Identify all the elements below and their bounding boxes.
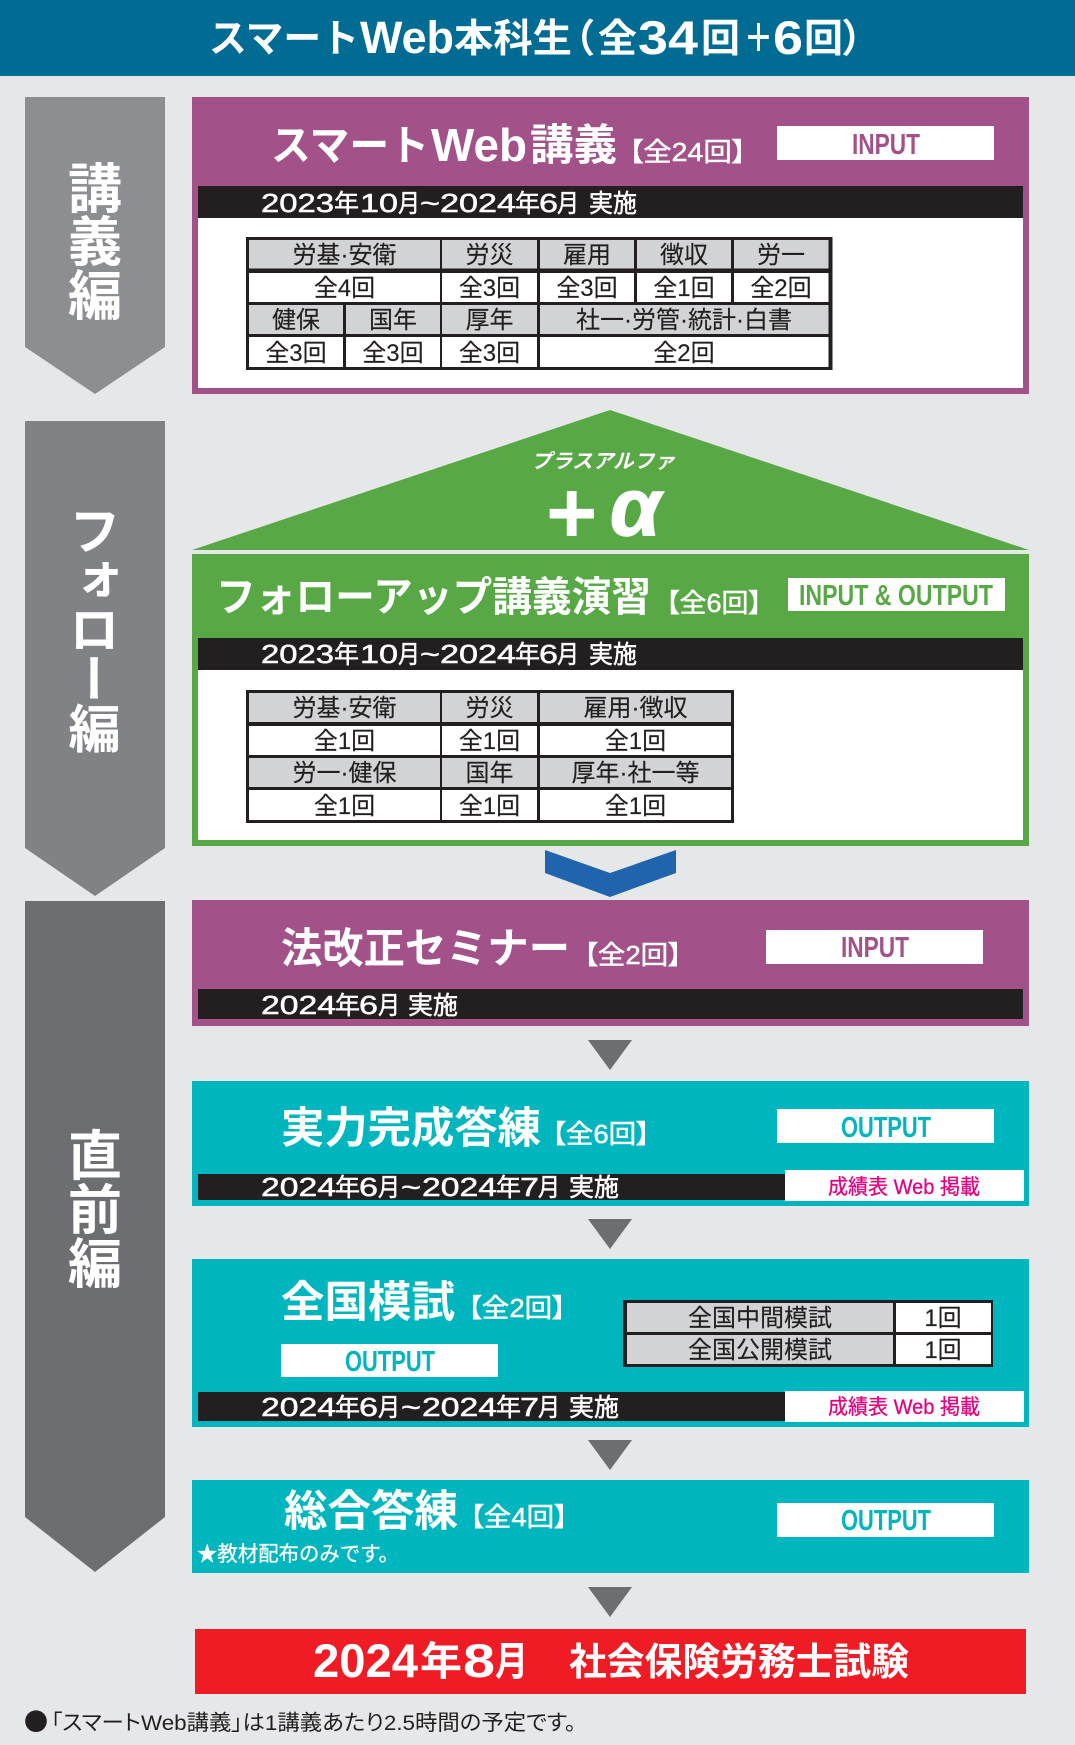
roof: プラスアルファ +α: プラスアルファ bbox=[531, 450, 676, 473]
side arrow: 講義編: 義 bbox=[68, 213, 122, 273]
footnote: ● bbox=[24, 1702, 48, 1737]
panel: 全国模試: ~ bbox=[401, 1392, 421, 1422]
panel: 全国模試: 成績表 Web 掲載 bbox=[828, 1396, 980, 1419]
panel: 実力完成答練: ~ bbox=[401, 1172, 421, 1202]
panel: 総合答練: 総合答練 bbox=[284, 1488, 458, 1536]
table: 講義 schedule: 全4回 bbox=[314, 275, 375, 302]
table: 講義 schedule: 全3回 bbox=[265, 340, 327, 367]
panel: フォローアップ講義演習: 2023 bbox=[261, 639, 334, 669]
table: 講義 schedule bbox=[246, 237, 832, 370]
roof: プラスアルファ +α: + bbox=[546, 463, 597, 562]
table: 講義 schedule: 全3回 bbox=[556, 275, 618, 302]
side arrow: 講義編: 編 bbox=[68, 267, 122, 327]
panel: 総合答練: 【全4回】 bbox=[470, 1502, 568, 1532]
table: フォローアップ schedule: 労災 bbox=[466, 695, 514, 722]
side arrow: 直前編: 編 bbox=[68, 1235, 122, 1295]
table: 講義 schedule: 国年 bbox=[369, 307, 417, 334]
panel: 全国模試: 月 bbox=[378, 1394, 400, 1422]
panel: 法改正セミナー: 2024 bbox=[261, 990, 336, 1020]
panel: スマートWeb講義: 【全24回】 bbox=[629, 137, 746, 167]
panel: 全国模試: 月 bbox=[538, 1394, 560, 1422]
banner: exam date: 8 bbox=[463, 1634, 495, 1687]
panel: 実力完成答練: 【全6回】 bbox=[552, 1119, 650, 1149]
arrow: gray triangle 3 bbox=[588, 1440, 632, 1470]
table: 講義 schedule: 労災 bbox=[466, 242, 514, 269]
side arrow: フォロー編 bbox=[25, 421, 165, 896]
banner: exam date bbox=[195, 1629, 1026, 1694]
panel: フォローアップ講義演習: 月 bbox=[557, 641, 579, 669]
banner: exam date: 月 bbox=[495, 1640, 528, 1684]
panel: 法改正セミナー: 6 bbox=[359, 990, 378, 1020]
arrow: blue chevron bbox=[545, 850, 676, 897]
header bar: 回 bbox=[804, 18, 843, 61]
panel: スマートWeb講義: 6 bbox=[539, 188, 558, 218]
panel: 法改正セミナー: 【全2回】 bbox=[584, 940, 682, 970]
panel: 実力完成答練: OUTPUT bbox=[841, 1112, 931, 1144]
header bar: ＋ bbox=[744, 18, 773, 61]
panel: 法改正セミナー: 年 bbox=[335, 992, 360, 1020]
panel: スマートWeb講義: 10 bbox=[360, 188, 398, 218]
panel: 総合答練: ★教材配布のみです。 bbox=[197, 1538, 399, 1568]
table: 全国模試 schedule: 全国中間模試 bbox=[688, 1305, 832, 1332]
table: 全国模試 schedule: 1回 bbox=[924, 1337, 962, 1364]
panel: 法改正セミナー: 法改正セミナー bbox=[281, 925, 570, 972]
panel: フォローアップ講義演習 bbox=[192, 554, 1029, 846]
panel: 法改正セミナー: 月 bbox=[378, 992, 400, 1020]
table: フォローアップ schedule: 雇用·徴収 bbox=[584, 695, 688, 722]
panel: 全国模試: 2024 bbox=[261, 1392, 336, 1422]
panel: フォローアップ講義演習: 年 bbox=[334, 641, 359, 669]
panel: スマートWeb講義: INPUT bbox=[852, 129, 920, 161]
table: 全国模試 schedule: 全国公開模試 bbox=[688, 1337, 832, 1364]
table: 講義 schedule: 社一·労管·統計·白書 bbox=[576, 307, 792, 334]
panel: 実力完成答練: 年 bbox=[335, 1174, 360, 1202]
panel: 実力完成答練: 2024 bbox=[261, 1172, 336, 1202]
side arrow: 直前編: 前 bbox=[68, 1181, 122, 1241]
header bar: 全 bbox=[598, 18, 637, 61]
panel: 全国模試: 年 bbox=[496, 1394, 521, 1422]
panel: スマートWeb講義: 月 bbox=[398, 190, 420, 218]
panel: 総合答練: OUTPUT bbox=[841, 1505, 931, 1537]
panel: 総合答練 bbox=[192, 1480, 1029, 1573]
panel: スマートWeb講義: 2023 bbox=[261, 188, 334, 218]
panel: 実力完成答練: 実施 bbox=[569, 1174, 619, 1202]
header bar bbox=[0, 0, 1075, 76]
panel: 全国模試: 6 bbox=[359, 1392, 378, 1422]
arrow: gray triangle 2 bbox=[588, 1219, 632, 1249]
table: 講義 schedule: 全2回 bbox=[653, 340, 715, 367]
panel: 実力完成答練: 月 bbox=[378, 1174, 400, 1202]
table: 講義 schedule: 全3回 bbox=[459, 275, 520, 302]
panel: 全国模試: OUTPUT bbox=[345, 1346, 435, 1378]
table: 講義 schedule: 健保 bbox=[272, 307, 320, 334]
table: フォローアップ schedule: 全1回 bbox=[605, 793, 666, 820]
banner: exam date: 社会保険労務士試験 bbox=[569, 1642, 909, 1684]
panel: フォローアップ講義演習: 年 bbox=[515, 641, 540, 669]
footnote: 「スマートWeb講義」は1講義あたり2.5時間の予定です。 bbox=[51, 1711, 576, 1735]
panel: 実力完成答練: 月 bbox=[538, 1174, 560, 1202]
panel: 法改正セミナー: INPUT bbox=[841, 932, 909, 964]
panel: スマートWeb講義: 年 bbox=[334, 190, 359, 218]
header bar: （ bbox=[574, 18, 594, 61]
header bar: ） bbox=[842, 18, 863, 61]
panel: スマートWeb講義: Web bbox=[431, 119, 527, 171]
header bar: スマート bbox=[209, 18, 359, 61]
panel: フォローアップ講義演習: 2024 bbox=[440, 639, 516, 669]
panel: 全国模試: 【全2回】 bbox=[468, 1293, 566, 1323]
panel: フォローアップ講義演習: ~ bbox=[420, 639, 440, 669]
panel: 全国模試 bbox=[192, 1259, 1029, 1427]
panel: スマートWeb講義: 講義 bbox=[530, 122, 617, 170]
panel: 実力完成答練: 7 bbox=[520, 1172, 539, 1202]
arrow: gray triangle 4 bbox=[588, 1587, 632, 1617]
panel: スマートWeb講義: ~ bbox=[420, 188, 440, 218]
side arrow: 講義編 bbox=[25, 97, 165, 394]
panel: フォローアップ講義演習: INPUT & OUTPUT bbox=[799, 580, 993, 612]
panel: 全国模試: 2024 bbox=[422, 1392, 497, 1422]
panel: 実力完成答練: 年 bbox=[496, 1174, 521, 1202]
panel: フォローアップ講義演習: 10 bbox=[360, 639, 398, 669]
panel: 全国模試: 7 bbox=[520, 1392, 539, 1422]
footnote bbox=[24, 1702, 576, 1737]
header bar: Web bbox=[360, 12, 454, 63]
panel: 法改正セミナー: 実施 bbox=[408, 992, 458, 1020]
header bar: 6 bbox=[773, 11, 803, 64]
table: 講義 schedule: 全2回 bbox=[750, 275, 812, 302]
header bar: 34 bbox=[638, 11, 698, 64]
panel: 実力完成答練: 成績表 Web 掲載 bbox=[828, 1176, 980, 1199]
panel: 実力完成答練: 実力完成答練 bbox=[281, 1105, 541, 1153]
panel: 実力完成答練: 2024 bbox=[422, 1172, 497, 1202]
panel: スマートWeb講義: 月 bbox=[557, 190, 579, 218]
table: 講義 schedule: 全3回 bbox=[459, 340, 520, 367]
arrow: gray triangle 1 bbox=[588, 1040, 632, 1070]
panel: 全国模試: 実施 bbox=[569, 1394, 619, 1422]
side arrow: 直前編: 直 bbox=[68, 1127, 122, 1187]
header bar: 本科生 bbox=[454, 18, 572, 61]
table: 講義 schedule: 労基·安衛 bbox=[292, 242, 396, 269]
table: 講義 schedule: 全1回 bbox=[653, 275, 715, 302]
panel: フォローアップ講義演習: 6 bbox=[539, 639, 558, 669]
panel: フォローアップ講義演習: 【全6回】 bbox=[666, 588, 762, 618]
panel: フォローアップ講義演習: フォローアップ講義演習 bbox=[216, 574, 651, 620]
table: 全国模試 schedule bbox=[623, 1300, 993, 1367]
table: フォローアップ schedule: 全1回 bbox=[459, 728, 520, 755]
roof: プラスアルファ +α: α bbox=[610, 462, 664, 553]
panel: スマートWeb講義: 年 bbox=[515, 190, 540, 218]
table: フォローアップ schedule: 国年 bbox=[466, 760, 514, 787]
table: フォローアップ schedule: 全1回 bbox=[314, 793, 375, 820]
table: フォローアップ schedule: 労基·安衛 bbox=[292, 695, 396, 722]
panel: スマートWeb講義: 実施 bbox=[589, 190, 637, 218]
side arrow: 直前編 bbox=[25, 901, 165, 1572]
roof: プラスアルファ +α bbox=[192, 410, 1029, 562]
table: 講義 schedule: 厚年 bbox=[466, 307, 514, 334]
table: 講義 schedule: 徴収 bbox=[660, 242, 708, 269]
panel: 全国模試: 全国模試 bbox=[281, 1279, 455, 1327]
table: フォローアップ schedule bbox=[246, 690, 734, 823]
side arrow: フォロー編: フォロー編 bbox=[60, 504, 120, 753]
table: フォローアップ schedule: 厚年·社一等 bbox=[572, 760, 700, 787]
table: フォローアップ schedule: 全1回 bbox=[314, 728, 375, 755]
table: 講義 schedule: 全3回 bbox=[362, 340, 424, 367]
panel: 実力完成答練 bbox=[192, 1081, 1029, 1206]
panel: スマートWeb講義: 2024 bbox=[440, 188, 516, 218]
panel: 全国模試: 年 bbox=[335, 1394, 360, 1422]
table: 講義 schedule: 労一 bbox=[757, 242, 805, 269]
banner: exam date: 年 bbox=[420, 1640, 462, 1684]
panel: フォローアップ講義演習: 月 bbox=[398, 641, 420, 669]
banner: exam date: 2024 bbox=[313, 1634, 418, 1687]
table: フォローアップ schedule: 全1回 bbox=[459, 793, 520, 820]
table: 講義 schedule: 雇用 bbox=[563, 242, 611, 269]
header bar: 回 bbox=[701, 18, 740, 61]
panel: フォローアップ講義演習: 実施 bbox=[589, 641, 637, 669]
table: フォローアップ schedule: 全1回 bbox=[605, 728, 666, 755]
side arrow: 講義編: 講 bbox=[68, 160, 122, 220]
panel: スマートWeb講義 bbox=[192, 97, 1029, 394]
panel: スマートWeb講義: スマート bbox=[271, 122, 429, 169]
table: フォローアップ schedule: 労一·健保 bbox=[292, 760, 396, 787]
panel: 実力完成答練: 6 bbox=[359, 1172, 378, 1202]
panel: 法改正セミナー bbox=[192, 900, 1029, 1026]
table: 全国模試 schedule: 1回 bbox=[924, 1305, 962, 1332]
